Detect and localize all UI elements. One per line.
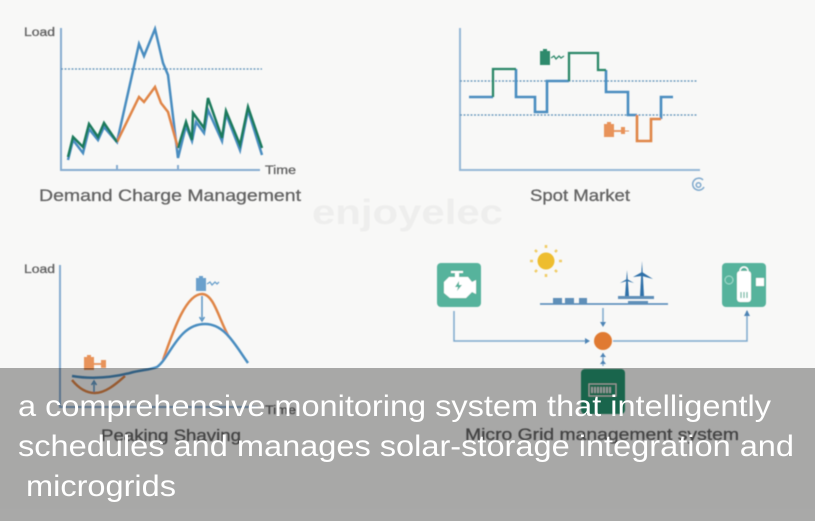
green steps — [493, 53, 606, 97]
caption line 2: schedules and manages solar-storage integration and — [18, 430, 794, 463]
axis label: time: Time — [265, 405, 296, 417]
panel: demand charge management — [24, 27, 301, 205]
orange original curve — [72, 294, 229, 393]
caption band — [0, 368, 815, 521]
icon: corner logo — [693, 178, 704, 190]
arrow: down — [200, 296, 204, 321]
arrow: up — [92, 381, 96, 392]
axis label: load: Load — [24, 27, 55, 39]
icon: green battery — [540, 49, 564, 65]
threshold line — [61, 68, 262, 70]
junction node — [594, 332, 612, 350]
connector lines — [454, 308, 747, 366]
blue steps — [469, 69, 673, 119]
icon: sun — [530, 245, 562, 277]
axes — [60, 265, 258, 407]
panel: peaking shaving — [24, 264, 296, 445]
panel: spot market — [460, 28, 704, 205]
caption line 1: a comprehensive monitoring system that intelligently — [18, 390, 771, 423]
axes — [460, 28, 700, 170]
blue load line — [68, 29, 262, 160]
icon: orange battery plug — [604, 122, 629, 137]
orange shaved line — [117, 87, 178, 148]
green line after peak — [178, 98, 262, 148]
green line before peak — [68, 123, 117, 157]
axes — [61, 28, 260, 170]
caption line 3: microgrids — [26, 470, 176, 503]
infographic artwork — [24, 27, 766, 445]
axis label: load: Load — [24, 264, 55, 276]
panel: micro grid — [437, 245, 766, 444]
icon: blue battery — [196, 276, 219, 291]
heading: Micro Grid management system — [465, 425, 739, 444]
axis label: time: Time — [265, 165, 296, 177]
heading: Peaking Shaving — [101, 426, 241, 445]
icon: orange battery plug — [84, 355, 106, 370]
arrow heads — [585, 310, 750, 364]
icon: battery storage — [581, 369, 625, 414]
icon: load cabinet — [722, 263, 766, 307]
caption text — [18, 390, 794, 503]
icon: solar and wind generation — [540, 261, 668, 304]
watermark: enjoyelec — [312, 193, 503, 232]
price lines — [460, 81, 697, 115]
heading: Demand Charge Management — [39, 186, 301, 205]
blue shaved curve — [72, 324, 248, 378]
orange steps — [637, 115, 661, 141]
heading: Spot Market — [530, 186, 630, 205]
icon: engine — [437, 263, 481, 307]
